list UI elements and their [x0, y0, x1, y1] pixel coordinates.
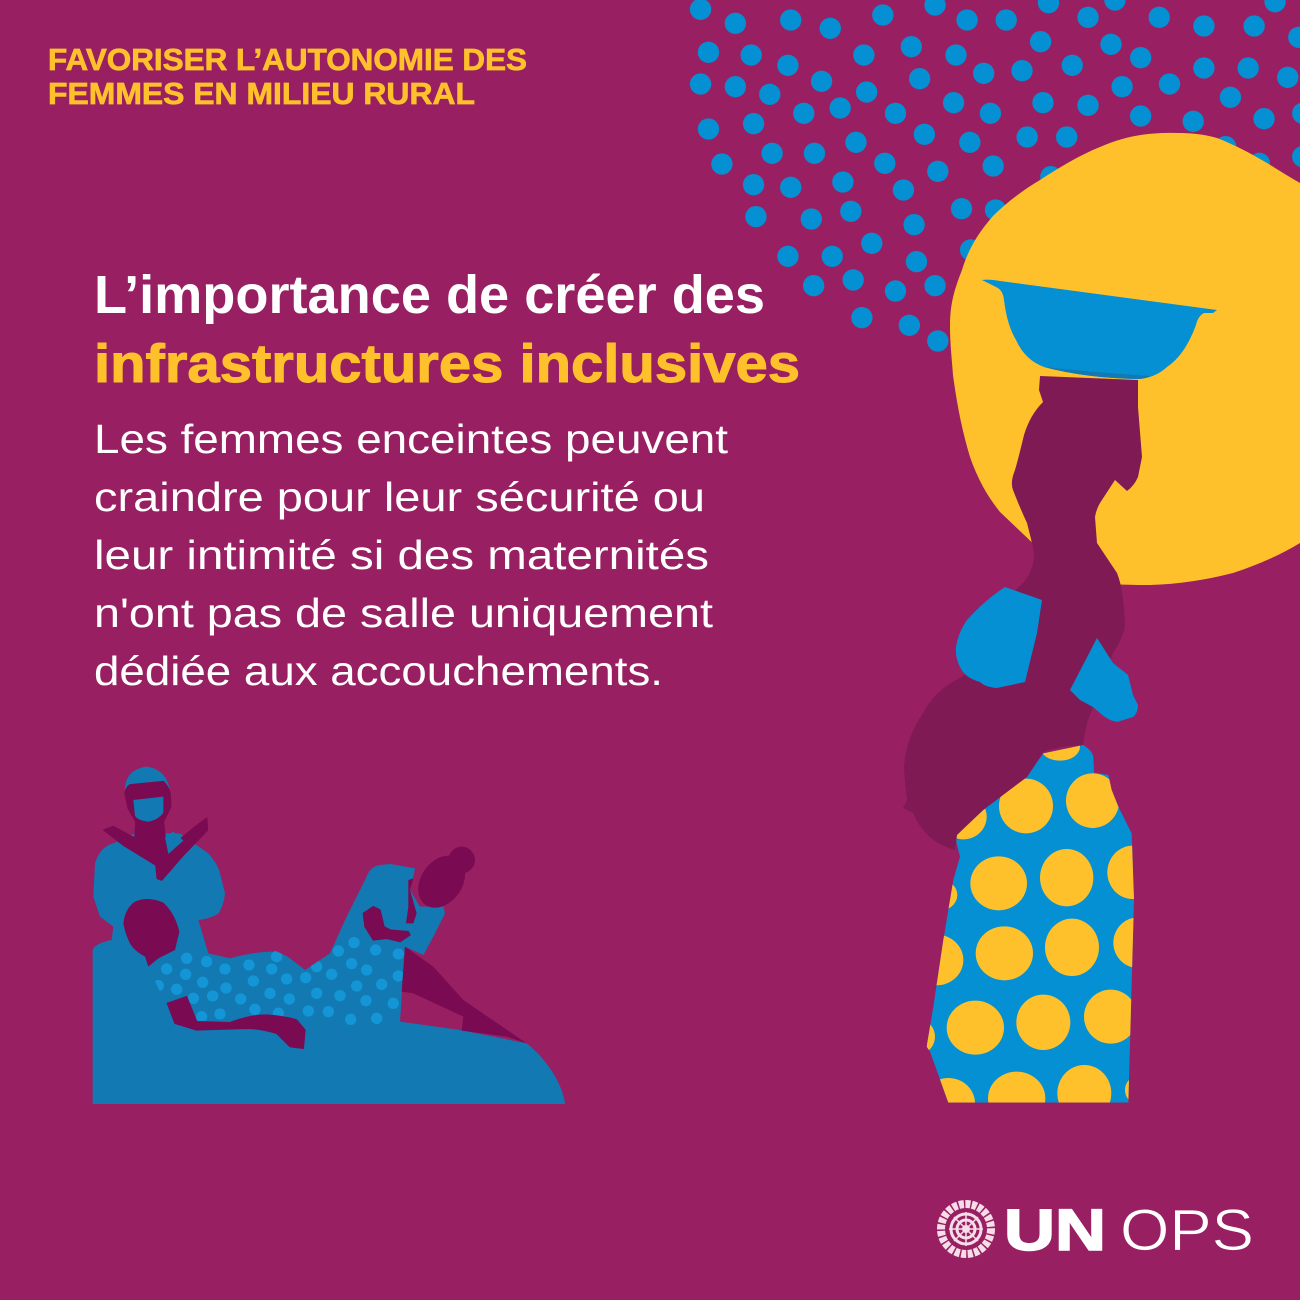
body text: n'ont pas de salle uniquement: [94, 590, 714, 636]
main heading: [94, 265, 800, 394]
title: FEMMES EN MILIEU RURAL: [48, 76, 475, 111]
main heading: L’importance de créer des: [94, 265, 765, 325]
patient raised hand: [363, 907, 410, 942]
doctor shoulder highlight: [165, 832, 183, 854]
left blue sleeve: [956, 587, 1042, 688]
UNOPS logo: [941, 1198, 1254, 1263]
body text: leur intimité si des maternités: [94, 532, 709, 578]
right blue sleeve: [1070, 638, 1138, 722]
body text: craindre pour leur sécurité ou: [94, 474, 705, 520]
title: FAVORISER L’AUTONOMIE DES: [48, 42, 527, 77]
patient leg: [402, 947, 527, 1043]
yellow sun blob: [950, 133, 1300, 585]
body text: dédiée aux accouchements.: [94, 648, 663, 694]
patient head: [123, 899, 179, 967]
doctor face and crossed arms: [104, 782, 207, 880]
nurse head: [408, 847, 475, 917]
OPS wordmark: OPS: [1120, 1198, 1254, 1263]
doctor mask: [133, 797, 163, 822]
dot pattern top right: [690, 0, 1300, 352]
patient arm: [167, 997, 305, 1048]
body silhouette: [903, 376, 1142, 850]
body text: [94, 416, 729, 694]
doctor cap: [125, 767, 170, 793]
UN wordmark: UN: [1004, 1198, 1106, 1263]
body text: Les femmes enceintes peuvent: [94, 416, 729, 462]
childbirth scene illustration: [93, 767, 565, 1104]
washing bowl on head: [982, 280, 1217, 379]
patterned skirt: [926, 745, 1134, 1103]
UN emblem: [941, 1204, 991, 1254]
dress dots: [153, 937, 404, 1025]
nurse neck: [406, 878, 417, 923]
pregnant woman figure: [903, 280, 1217, 1129]
title: [48, 42, 527, 111]
main heading: infrastructures inclusives: [94, 334, 800, 394]
bed and figures silhouette: [93, 833, 565, 1104]
